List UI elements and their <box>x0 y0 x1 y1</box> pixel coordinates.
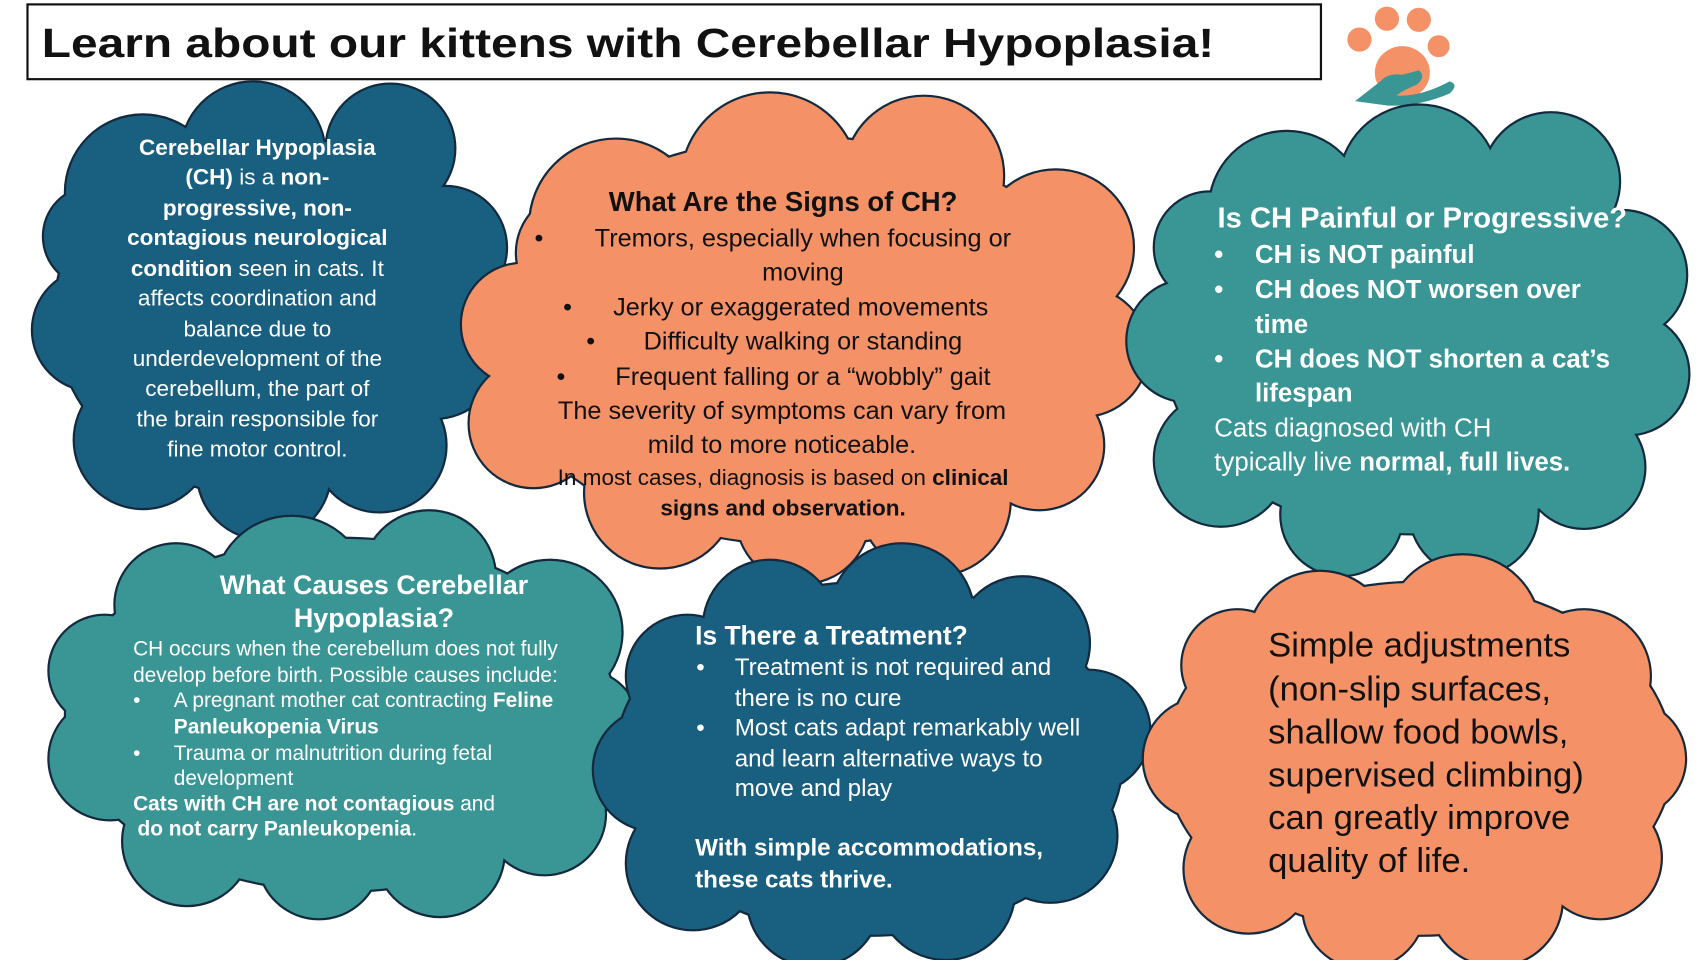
panel: what is CH: contagious neurological <box>127 225 388 250</box>
panel: what is CH: cerebellum, the part of <box>145 376 370 401</box>
panel: treatment: and learn alternative ways to <box>735 745 1043 772</box>
panel: signs of CH: The severity of symptoms can vary from <box>558 397 1006 425</box>
panel: what is CH: Cerebellar Hypoplasia <box>139 135 376 160</box>
panel: what is CH: progressive, non- <box>163 196 352 221</box>
panel: causes: Hypoplasia? <box>294 603 454 633</box>
panel: what is CH: condition seen in cats. It <box>131 256 385 281</box>
panel: signs of CH: • <box>557 363 565 391</box>
panel: signs of CH: mild to more noticeable. <box>648 431 916 459</box>
panel: simple adjustments: can greatly improve <box>1268 799 1570 837</box>
panel: painful or progressive: typically live normal, full lives. <box>1214 449 1570 477</box>
panel: painful or progressive: • <box>1214 276 1223 304</box>
panel: simple adjustments <box>1144 555 1685 960</box>
panel: painful or progressive <box>1127 106 1688 575</box>
panel: painful or progressive: CH does NOT worsen over <box>1255 276 1581 304</box>
panel: causes: CH occurs when the cerebellum does not fully <box>133 637 558 660</box>
panel: signs of CH: • <box>563 294 572 322</box>
panel: causes: What Causes Cerebellar <box>220 570 529 600</box>
panel: causes: develop before birth. Possible causes include: <box>133 664 558 687</box>
panel: signs of CH: Tremors, especially when focusing or <box>595 224 1011 252</box>
title box: Learn about our kittens with Cerebellar Hypoplasia! <box>42 20 1214 66</box>
title box <box>27 4 1321 79</box>
panel: painful or progressive: lifespan <box>1255 379 1353 407</box>
panel: causes: do not carry Panleukopenia. <box>137 818 417 841</box>
panel: causes: A pregnant mother cat contracting Feline <box>174 689 553 712</box>
panel: causes: development <box>174 767 294 790</box>
panel: signs of CH: moving <box>762 258 844 286</box>
panel: what is CH: (CH) is a non- <box>185 165 329 190</box>
panel: signs of CH: What Are the Signs of CH? <box>609 186 957 217</box>
panel: signs of CH: • <box>586 328 595 356</box>
panel: simple adjustments: (non-slip surfaces, <box>1268 670 1551 708</box>
panel: what is CH <box>33 82 506 539</box>
panel: simple adjustments: shallow food bowls, <box>1268 713 1568 751</box>
panel: causes: • <box>133 689 140 712</box>
panel: painful or progressive: CH is NOT painful <box>1255 241 1475 269</box>
panel: painful or progressive: time <box>1255 311 1308 339</box>
panel: signs of CH: signs and observation. <box>660 496 906 521</box>
panel: causes: Trauma or malnutrition during fetal <box>174 742 492 765</box>
panel: simple adjustments: supervised climbing) <box>1268 756 1584 794</box>
panel: painful or progressive: Is CH Painful or Progressive? <box>1218 203 1627 235</box>
panel: simple adjustments: quality of life. <box>1268 842 1470 880</box>
panel: treatment: • <box>696 654 705 681</box>
panel: signs of CH: In most cases, diagnosis is based on clinical <box>558 465 1009 490</box>
panel: painful or progressive: Cats diagnosed with CH <box>1214 415 1491 443</box>
panel: what is CH: affects coordination and <box>138 286 377 311</box>
panel: treatment: • <box>696 715 705 742</box>
panel: treatment: Is There a Treatment? <box>695 620 968 650</box>
panel: what is CH: the brain responsible for <box>136 407 379 432</box>
panel: signs of CH <box>462 93 1147 583</box>
panel: painful or progressive: CH does NOT shorten a cat’s <box>1255 345 1610 373</box>
panel: causes: • <box>133 742 140 765</box>
panel: treatment: Treatment is not required and <box>735 654 1051 681</box>
panel: painful or progressive: • <box>1214 241 1223 269</box>
panel: causes: Cats with CH are not contagious and <box>133 792 495 815</box>
panel: treatment: move and play <box>735 775 893 802</box>
panel: simple adjustments: Simple adjustments <box>1268 626 1570 664</box>
panel: signs of CH: Difficulty walking or standing <box>644 328 962 356</box>
panel: treatment: there is no cure <box>735 685 901 712</box>
panel: causes <box>49 511 638 918</box>
panel: treatment: these cats thrive. <box>695 866 893 893</box>
panel: causes: Panleukopenia Virus <box>174 715 379 738</box>
panel: signs of CH: • <box>535 224 543 252</box>
panel: signs of CH: Frequent falling or a “wobbly” gait <box>615 363 991 391</box>
panel: treatment: Most cats adapt remarkably well <box>735 715 1080 742</box>
panel: treatment <box>594 544 1149 960</box>
panel: painful or progressive: • <box>1214 345 1223 373</box>
panel: signs of CH: Jerky or exaggerated movements <box>613 294 988 322</box>
icon: paw in hand logo <box>1347 7 1455 106</box>
panel: what is CH: underdevelopment of the <box>133 346 382 371</box>
panel: what is CH: fine motor control. <box>167 436 348 461</box>
panel: treatment: With simple accommodations, <box>695 835 1043 862</box>
panel: what is CH: balance due to <box>183 316 331 341</box>
